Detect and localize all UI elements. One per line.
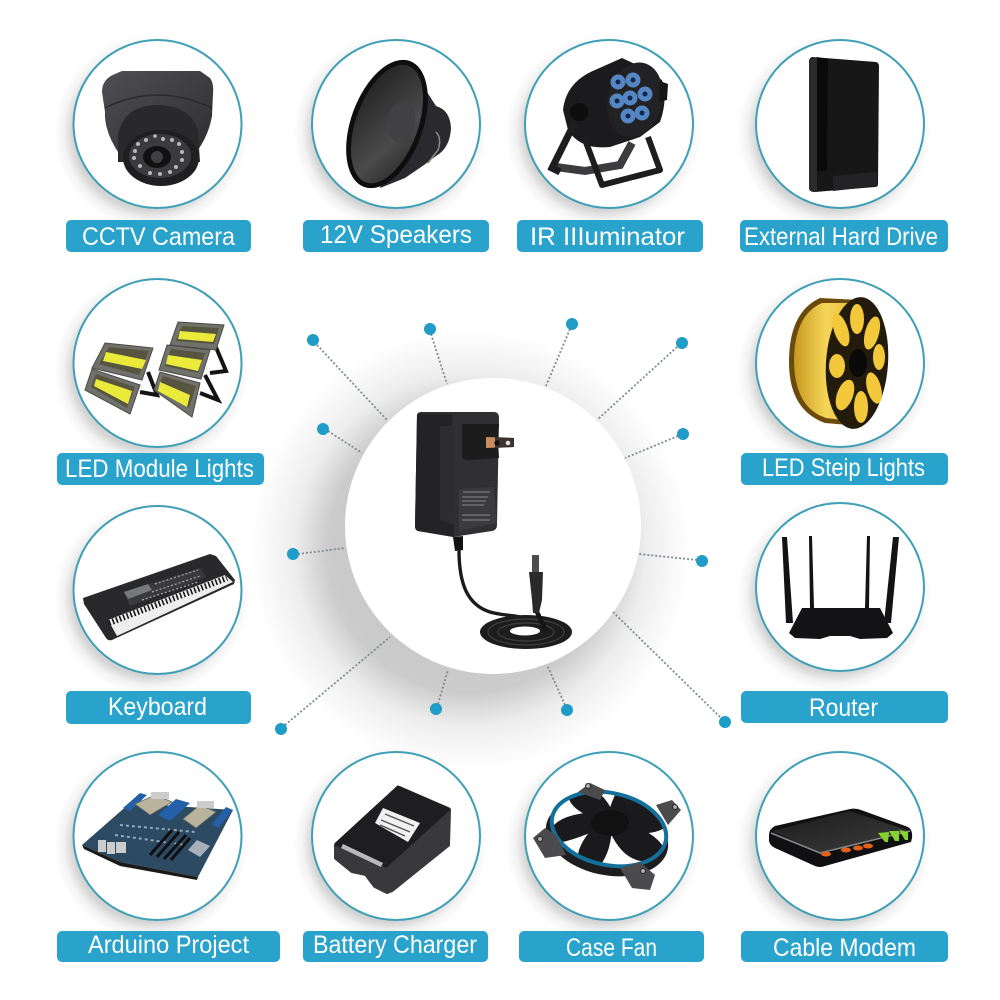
icon: dome camera — [102, 71, 213, 186]
panel: Arduino Project — [54, 747, 280, 962]
label: External Hard Drive — [744, 223, 938, 251]
label: Cable Modem — [773, 934, 916, 962]
label: CCTV Camera — [82, 223, 235, 251]
label: 12V Speakers — [320, 221, 472, 249]
panel: External Hard Drive — [737, 35, 948, 252]
dotted connector lines — [285, 329, 720, 725]
icon: par light — [552, 57, 670, 185]
panel: Router — [737, 498, 948, 723]
label — [57, 931, 280, 962]
label — [741, 931, 948, 962]
panel: IR Illuminator — [506, 35, 703, 252]
label — [66, 691, 251, 724]
connector dots — [275, 318, 731, 735]
panel: Battery Charger — [293, 747, 488, 962]
label: LED Steip Lights — [762, 454, 925, 482]
icon: power adapter — [415, 412, 572, 649]
icon: router — [782, 536, 899, 639]
panel: LED Module Lights — [54, 274, 264, 485]
icon: case fan — [533, 782, 681, 890]
icon: cable modem — [769, 809, 912, 867]
label: Case Fan — [566, 934, 657, 962]
label — [741, 691, 948, 723]
label — [519, 931, 704, 962]
panel: Case Fan — [506, 747, 704, 962]
label: Arduino Project — [88, 931, 249, 959]
panel: Keyboard — [54, 501, 251, 724]
icon: speaker — [330, 49, 451, 199]
label: Router — [809, 694, 878, 722]
icon: LED strip reel — [789, 295, 893, 431]
label: Keyboard — [108, 693, 207, 721]
panel: LED Strip Lights — [737, 274, 948, 485]
icon: motherboard — [82, 792, 233, 880]
panel: 12V Speakers — [293, 35, 489, 252]
label: LED Module Lights — [65, 455, 254, 483]
icon: battery charger — [336, 787, 449, 892]
icon: flood lights — [85, 322, 226, 417]
icon: external drive — [809, 57, 879, 192]
icon: electronic keyboard — [83, 554, 235, 640]
label: IR IIIuminator — [530, 223, 685, 251]
label: Battery Charger — [313, 931, 477, 959]
panel: Cable Modem — [737, 747, 948, 962]
panel: CCTV Camera — [54, 35, 251, 252]
central shadow and disc — [250, 330, 690, 770]
